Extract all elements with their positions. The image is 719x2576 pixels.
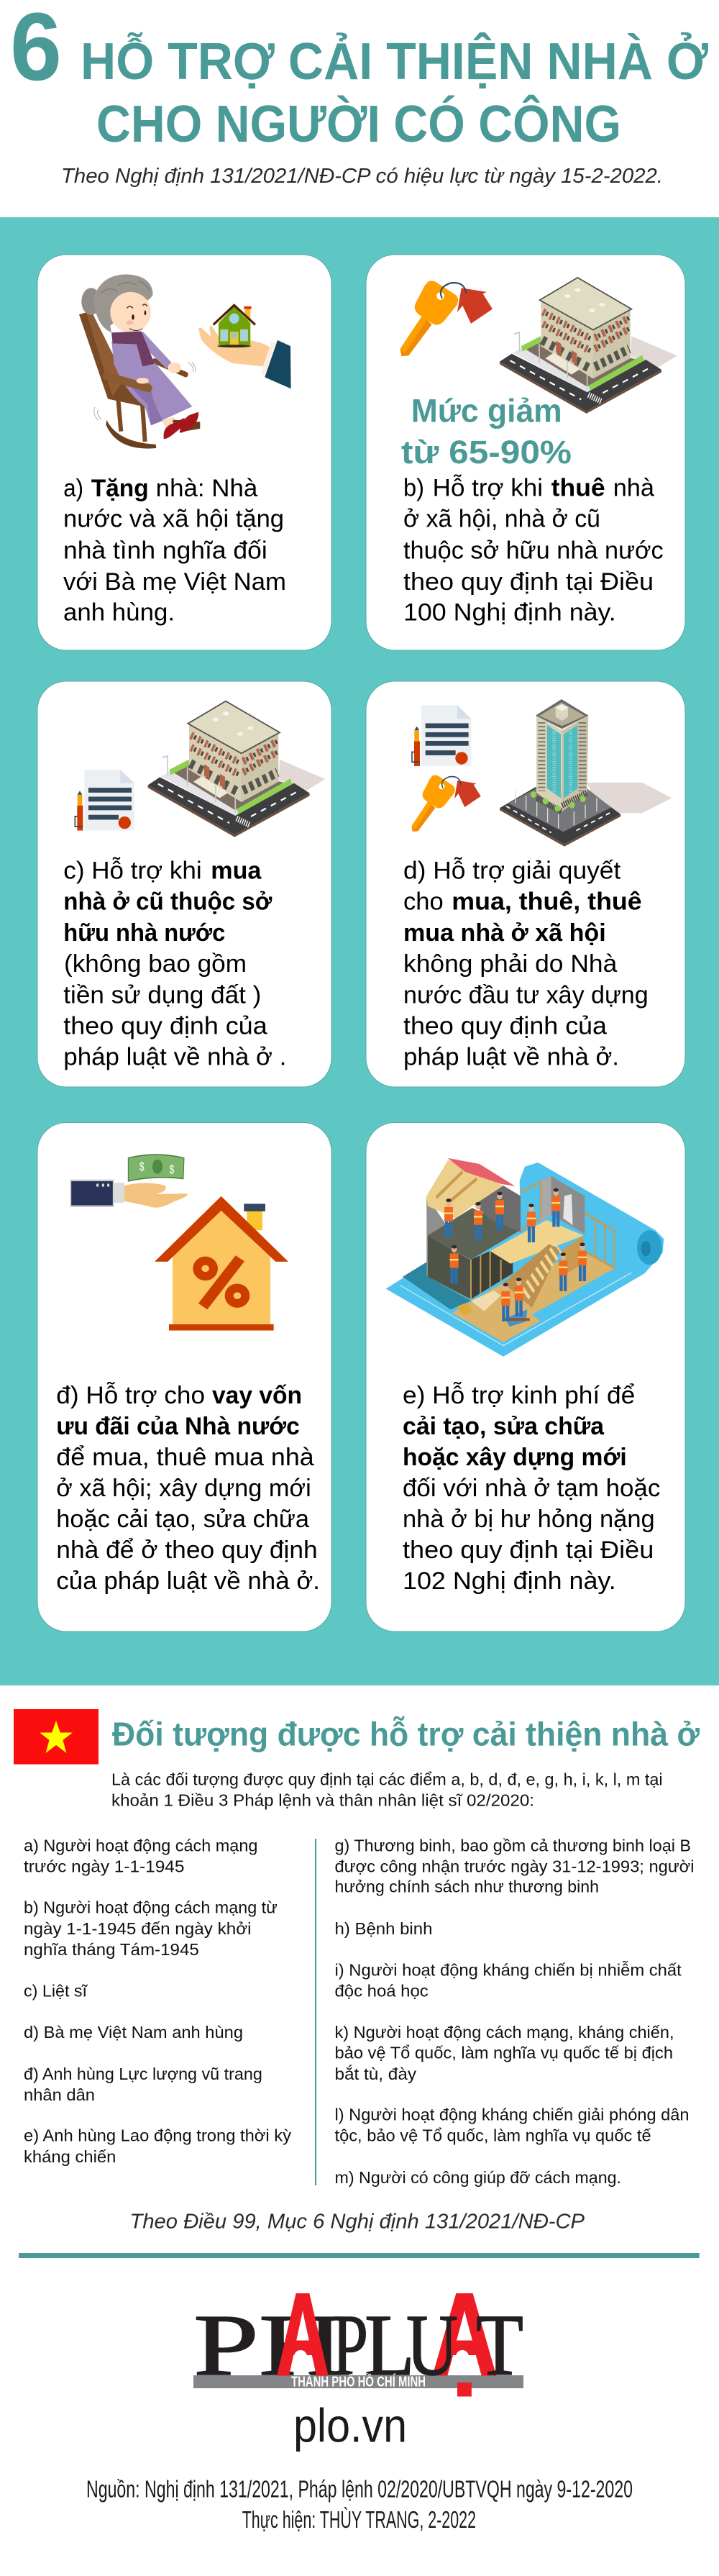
- header: title: [10, 0, 709, 153]
- text e: [403, 1381, 660, 1595]
- text d: mua, thuê, thuê: [452, 888, 642, 915]
- icon: hand holding green house: [198, 305, 291, 388]
- callout: discount 65-90%: từ 65-90%: [401, 434, 572, 470]
- logo: Pháp Luật: L: [365, 2297, 415, 2394]
- list: left column: nghĩa tháng Tám-1945: [24, 1940, 199, 1959]
- text đ: ưu đãi của Nhà nước: [56, 1413, 300, 1440]
- list: right column: i) Người hoạt động kháng chiến bị nhiễm chất: [335, 1960, 682, 1979]
- callout: discount 65-90%: Mức giảm: [411, 393, 562, 429]
- text b: nhà: [613, 474, 655, 501]
- text e: e) Hỗ trợ kinh phí để: [403, 1381, 635, 1409]
- list: left column: d) Bà mẹ Việt Nam anh hùng: [24, 2023, 243, 2042]
- list: left column: b) Người hoạt động cách mạng từ: [24, 1898, 278, 1917]
- text đ: vay vốn: [212, 1382, 302, 1409]
- text d: theo quy định của: [403, 1013, 608, 1040]
- list: left column: ngày 1-1-1945 đến ngày khởi: [24, 1919, 252, 1938]
- panel d: nhà ở xã hội: [366, 681, 685, 1087]
- text đ: [56, 1381, 320, 1595]
- icon: house under renovation on blueprint: [386, 1158, 664, 1357]
- text đ: hoặc cải tạo, sửa chữa: [56, 1506, 310, 1533]
- list: left column: trước ngày 1-1-1945: [24, 1857, 184, 1875]
- text b: b): [403, 474, 424, 501]
- text c: tiền sử dụng đất ): [63, 982, 261, 1009]
- text a: nhà tình nghĩa đối: [63, 537, 267, 565]
- list: right column: độc hoá học: [335, 1981, 429, 2000]
- text d: mua nhà ở xã hội: [403, 919, 606, 947]
- panel b: thuê nhà: [366, 255, 685, 650]
- list: right column: g) Thương binh, bao gồm cả thương binh loại B: [335, 1836, 691, 1854]
- logo: Pháp Luật: P: [332, 2297, 368, 2394]
- text d: cho: [403, 888, 444, 915]
- text đ: để mua, thuê mua nhà: [56, 1444, 315, 1471]
- list: right column: [335, 1836, 695, 2187]
- text e: theo quy định tại Điều: [403, 1537, 654, 1564]
- panel đ: vay vốn ưu đãi: [37, 1122, 331, 1631]
- list: right column: h) Bệnh binh: [335, 1919, 432, 1938]
- list: right column: bảo vệ Tổ quốc, làm nghĩa vụ quốc tế bị địch: [335, 2044, 673, 2062]
- logo: Pháp Luật: T: [476, 2297, 523, 2394]
- text b: [403, 473, 664, 626]
- list: left column: đ) Anh hùng Lực lượng vũ trang: [24, 2065, 262, 2083]
- icon: grandmother in rocking chair: [79, 274, 200, 449]
- callout: discount 65-90%: [401, 393, 572, 470]
- text b: thuộc sở hữu nhà nước: [403, 537, 664, 565]
- list: left column: c) Liệt sĩ: [24, 1981, 88, 2000]
- teal cards background: [0, 217, 719, 1685]
- text b: theo quy định tại Điều: [403, 568, 654, 596]
- text đ: đ) Hỗ trợ cho: [56, 1381, 205, 1409]
- icon: key: [411, 775, 481, 832]
- list: left column: e) Anh hùng Lao động trong thời kỳ: [24, 2126, 292, 2145]
- text b: 100 Nghị định này.: [403, 599, 616, 626]
- list: right column: được công nhận trước ngày 31-12-1993; người: [335, 1857, 695, 1875]
- panel a: tặng nhà: [37, 255, 331, 650]
- text c: nhà ở cũ thuộc sở: [63, 888, 273, 915]
- logo: Pháp Luật: Á: [276, 2270, 329, 2400]
- list: left column: kháng chiến: [24, 2147, 116, 2166]
- author credit: Thực hiện: THÙY TRANG, 2-2022: [242, 2506, 476, 2533]
- text d: pháp luật về nhà ở.: [403, 1043, 619, 1070]
- text d: không phải do Nhà: [403, 950, 618, 978]
- panel c: mua nhà ở cũ: [37, 681, 331, 1087]
- panel e: cải tạo, sửa chữa: [366, 1122, 685, 1631]
- intro paragraph: [111, 1770, 663, 1809]
- text đ: nhà để ở theo quy định: [56, 1537, 318, 1564]
- icon: key: [400, 281, 493, 356]
- list: left column: [24, 1836, 292, 2166]
- icon: contract document and pen: [75, 770, 134, 831]
- intro paragraph: khoản 1 Điều 3 Pháp lệnh và thân nhân liệt sĩ 02/2020:: [111, 1790, 534, 1809]
- list: right column: l) Người hoạt động kháng chiến giải phóng dân: [335, 2105, 689, 2124]
- text c: hữu nhà nước: [63, 919, 225, 947]
- text a: nhà: Nhà: [156, 475, 258, 502]
- list: left column: nhân dân: [24, 2085, 95, 2104]
- logo: Pháp Luật: U: [406, 2297, 458, 2394]
- icon: high-rise tower: [500, 699, 672, 847]
- icon: hand with money: $: [170, 1163, 175, 1177]
- legal reference note: Theo Điều 99, Mục 6 Nghị định 131/2021/NĐ-CP: [129, 2210, 585, 2233]
- text a: Tặng: [91, 475, 149, 502]
- icon: Vietnam flag: [14, 1709, 99, 1765]
- icon: hand with money: $: [139, 1161, 145, 1174]
- list: right column: tộc, bảo vệ Tổ quốc, làm nghĩa vụ quốc tế: [335, 2126, 651, 2145]
- icon: hand with money: [70, 1155, 188, 1208]
- text c: c) Hỗ trợ khi: [63, 856, 202, 885]
- text e: nhà ở bị hư hỏng nặng: [403, 1506, 655, 1533]
- text a: anh hùng.: [63, 599, 175, 626]
- text c: mua: [211, 857, 262, 885]
- text d: [403, 856, 649, 1070]
- list: right column: bắt tù, đày: [335, 2065, 417, 2083]
- text e: 102 Nghị định này.: [403, 1567, 616, 1595]
- icon: house with percent sign: [155, 1196, 288, 1331]
- text d: d) Hỗ trợ giải quyết: [403, 856, 621, 885]
- text a: [63, 475, 286, 626]
- text e: hoặc xây dựng mới: [403, 1444, 627, 1471]
- subtitle: Theo Nghị định 131/2021/NĐ-CP có hiệu lực từ ngày 15-2-2022.: [61, 165, 663, 188]
- text a: a): [63, 475, 83, 502]
- text c: (không bao gồm: [64, 950, 247, 978]
- list: right column: m) Người có công giúp đỡ cách mạng.: [335, 2168, 621, 2187]
- icon: apartment building: [500, 278, 677, 414]
- text c: [63, 856, 286, 1070]
- text b: Hỗ trợ khi: [433, 473, 543, 501]
- icon: apartment building: [148, 701, 325, 837]
- text c: theo quy định của: [63, 1013, 268, 1040]
- list: left column: a) Người hoạt động cách mạng: [24, 1836, 257, 1854]
- logo: Pháp Luật: PH: [193, 2297, 344, 2394]
- text c: pháp luật về nhà ở .: [63, 1043, 286, 1070]
- text đ: của pháp luật về nhà ở.: [56, 1567, 320, 1595]
- list: right column: hưởng chính sách như thương binh: [335, 1878, 599, 1896]
- list: right column: k) Người hoạt động cách mạng, kháng chiến,: [335, 2023, 674, 2042]
- text b: thuê: [551, 474, 605, 501]
- logo: Pháp Luật: THÀNH PHỐ HỒ CHÍ MINH: [291, 2372, 426, 2390]
- text d: nước đầu tư xây dựng: [403, 982, 649, 1009]
- logo: Pháp Luật: Ậ: [431, 2270, 498, 2400]
- text e: đối với nhà ở tạm hoặc: [403, 1475, 660, 1502]
- icon: contract document and pen: [412, 705, 471, 766]
- title line 2: CHO NGƯỜI CÓ CÔNG: [96, 95, 621, 153]
- section heading: Đối tượng được hỗ trợ cải thiện nhà ở: [112, 1715, 700, 1752]
- text b: ở xã hội, nhà ở cũ: [403, 505, 600, 532]
- logo: Pháp Luật: [193, 2293, 523, 2397]
- text a: nước và xã hội tặng: [63, 505, 284, 532]
- intro paragraph: Là các đối tượng được quy định tại các điểm a, b, d, đ, e, g, h, i, k, l, m tại: [111, 1770, 663, 1788]
- text e: cải tạo, sửa chữa: [403, 1413, 605, 1440]
- text a: với Bà mẹ Việt Nam: [63, 568, 286, 596]
- text đ: ở xã hội; xây dựng mới: [56, 1475, 311, 1502]
- website: plo.vn: [293, 2399, 407, 2452]
